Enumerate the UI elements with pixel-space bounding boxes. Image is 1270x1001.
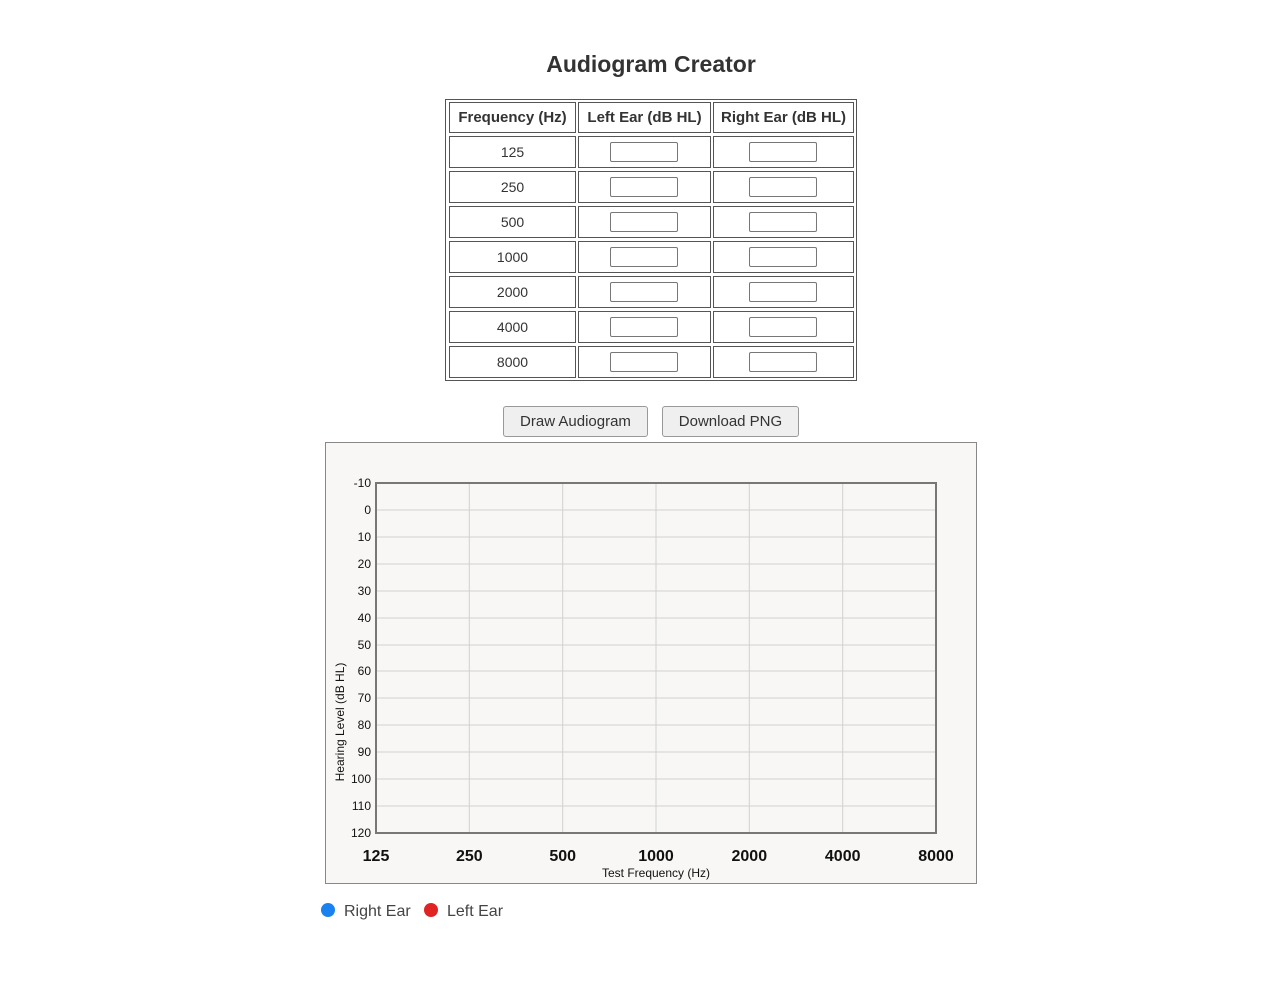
x-axis labels: 2000 xyxy=(732,848,767,865)
chart xyxy=(325,442,977,884)
y-axis labels: 60 xyxy=(358,664,371,678)
table: Frequency (Hz) xyxy=(458,109,567,126)
table xyxy=(445,99,857,381)
legend: Right Ear xyxy=(344,903,411,920)
table: 125 xyxy=(501,144,524,160)
x-axis labels: 500 xyxy=(549,848,576,865)
y-axis labels: -10 xyxy=(354,476,371,490)
y-axis labels: 90 xyxy=(358,745,371,759)
table: 4000 xyxy=(497,319,528,335)
button: download: Download PNG xyxy=(679,413,782,430)
button: download xyxy=(662,406,799,437)
button: draw xyxy=(503,406,648,437)
y-axis labels: 70 xyxy=(358,691,371,705)
table: 2000 xyxy=(497,284,528,300)
y-axis labels: 0 xyxy=(364,503,371,517)
table: Right Ear (dB HL) xyxy=(721,109,846,126)
x-axis labels: 1000 xyxy=(638,848,674,865)
legend xyxy=(321,903,503,920)
x-axis title: Test Frequency (Hz) xyxy=(602,866,710,880)
y-axis labels: 120 xyxy=(351,826,371,840)
table: 1000 xyxy=(497,249,528,265)
legend: Left Ear xyxy=(447,903,503,920)
y-axis labels: 10 xyxy=(358,530,371,544)
title: Audiogram Creator xyxy=(546,51,756,77)
table: 500 xyxy=(501,214,524,230)
x-axis labels: 250 xyxy=(456,848,483,865)
x-axis labels: 125 xyxy=(363,848,389,865)
y-axis title: Hearing Level (dB HL) xyxy=(333,663,347,781)
y-axis labels: 20 xyxy=(358,557,371,571)
x-axis labels: 8000 xyxy=(918,848,954,865)
y-axis labels: 30 xyxy=(358,584,371,598)
table: 8000 xyxy=(497,354,528,370)
table: 250 xyxy=(501,179,524,195)
y-axis labels xyxy=(351,476,371,840)
x-axis labels: 4000 xyxy=(825,848,861,865)
y-axis labels: 110 xyxy=(352,799,371,813)
x-axis labels xyxy=(363,848,954,865)
table: Left Ear (dB HL) xyxy=(587,109,702,126)
y-axis labels: 80 xyxy=(358,718,371,732)
y-axis labels: 50 xyxy=(358,638,371,652)
y-axis labels: 40 xyxy=(358,611,371,625)
button: draw: Draw Audiogram xyxy=(520,413,631,430)
y-axis labels: 100 xyxy=(351,772,371,786)
